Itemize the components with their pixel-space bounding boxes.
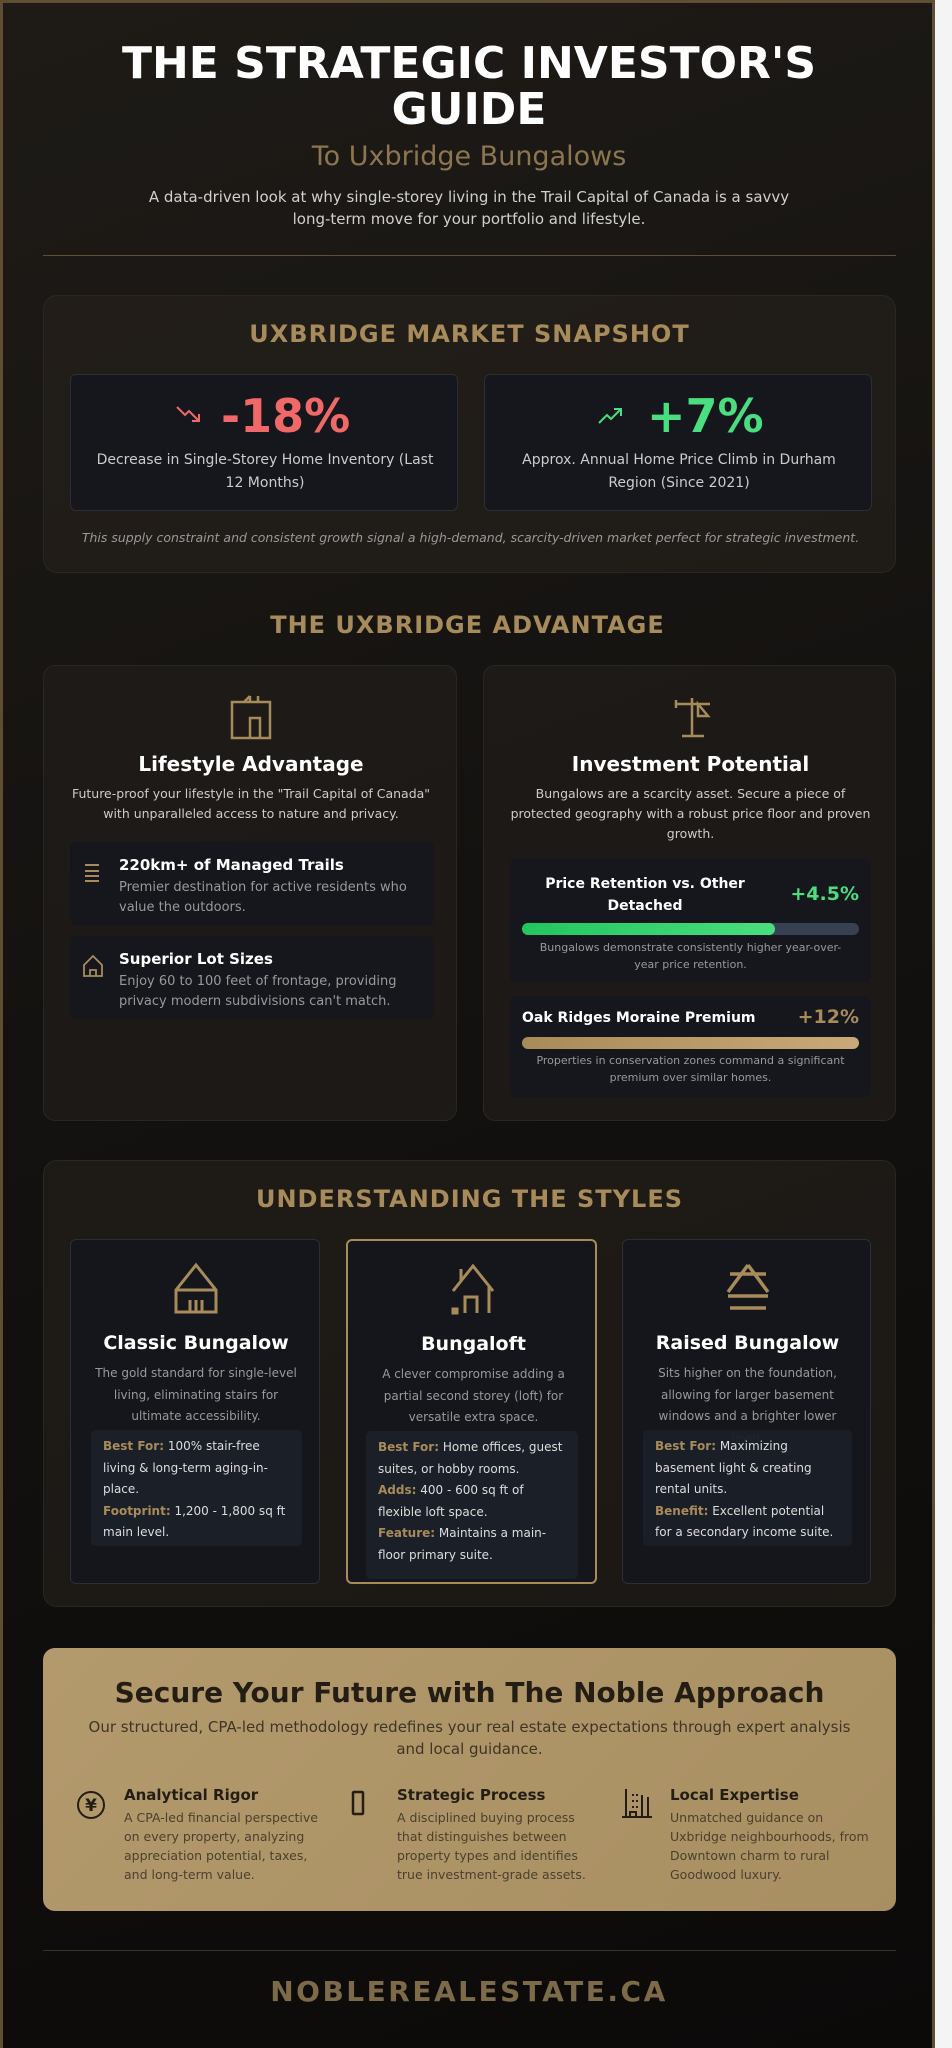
icon: yen (77, 1791, 105, 1819)
card: bungaloft: Adds: 400 - 600 sq ft of flexible loft space. (378, 1483, 524, 1518)
note: This supply constraint and consistent growth signal a high-demand, scarcity-driven market perfect for strategic investment. (82, 530, 859, 545)
item: trails (70, 842, 434, 925)
icon: down trend (176, 406, 200, 422)
panel: investment (483, 665, 896, 1121)
card: bungaloft: A clever compromise adding a partial second storey (loft) for versatile extra space. (382, 1367, 565, 1424)
card: bungaloft: Best For: Home offices, guest suites, or hobby rooms. (378, 1440, 562, 1476)
card: classic bungalow (70, 1239, 320, 1584)
panel: lifestyle (43, 665, 457, 1121)
bar: price retention: Price Retention vs. Other Detached (545, 876, 745, 914)
icon: building (230, 695, 272, 740)
card: bungaloft (346, 1239, 597, 1584)
icon: classic house (174, 1262, 218, 1314)
bar: price retention: Bungalows demonstrate consistently higher year-over-year price retention. (540, 941, 841, 971)
panel: market snapshot (43, 295, 896, 573)
CTA title: Secure Your Future with The Noble Approach (115, 1676, 824, 1709)
heading: advantage: THE UXBRIDGE ADVANTAGE (270, 611, 665, 639)
icon: yen: ¥ (85, 1796, 97, 1816)
bar: moraine premium (510, 996, 871, 1097)
panel: lifestyle: Future-proof your lifestyle in the "Trail Capital of Canada" with unparalleled access to nature and privacy. (72, 786, 430, 821)
column: strategic process (352, 1786, 586, 1882)
number: +7% (647, 389, 764, 443)
icon: phone (352, 1790, 364, 1816)
column: analytical rigor: A CPA-led financial perspective on every property, analyzing appreciation potential, taxes, and long-term value. (124, 1810, 318, 1882)
title: THE STRATEGIC INVESTOR'S (122, 38, 816, 89)
stat: inventory decrease (70, 374, 458, 511)
column: strategic process: Strategic Process (397, 1786, 545, 1804)
icon: stack (85, 864, 99, 882)
card title: Lifestyle Advantage (138, 752, 364, 776)
bar: moraine premium: Properties in conservation zones command a significant premium over similar homes. (536, 1054, 845, 1084)
card: classic bungalow: Footprint: 1,200 - 1,800 sq ft main level. (103, 1504, 285, 1539)
icon: buildings (622, 1789, 652, 1818)
card: raised bungalow (622, 1239, 871, 1584)
card: classic bungalow: Best For: 100% stair-free living & long-term aging-in-place. (103, 1439, 268, 1496)
icon: raised house (726, 1264, 770, 1310)
icon: up trend (598, 408, 622, 424)
card: classic bungalow: The gold standard for single-level living, eliminating stairs for ultimate accessibility. (95, 1366, 297, 1423)
stat: price climb (484, 374, 872, 511)
card: classic bungalow: Classic Bungalow (103, 1332, 289, 1354)
column: local expertise (622, 1786, 869, 1882)
column: strategic process: A disciplined buying process that distinguishes between property types and identifies true investment-grade assets. (397, 1810, 586, 1882)
item: trails: 220km+ of Managed Trails (119, 856, 344, 874)
icon: crane (674, 698, 710, 738)
heading: snapshot: UXBRIDGE MARKET SNAPSHOT (249, 320, 690, 348)
subtitle: To Uxbridge Bungalows (312, 141, 626, 172)
title: GUIDE (392, 84, 546, 135)
item: lot sizes: Superior Lot Sizes (119, 950, 273, 968)
card: bungaloft: Feature: Maintains a main-floor primary suite. (378, 1526, 546, 1562)
item: lot sizes: Enjoy 60 to 100 feet of frontage, providing privacy modern subdivisions can't match. (119, 974, 396, 1009)
card title: Investment Potential (572, 752, 809, 776)
icon: loft house (452, 1264, 494, 1314)
bar: moraine premium: Oak Ridges Moraine Premium (522, 1010, 756, 1026)
column: local expertise: Unmatched guidance on Uxbridge neighbourhoods, from Downtown charm to rural Goodwood luxury. (670, 1810, 869, 1882)
heading: styles: UNDERSTANDING THE STYLES (256, 1185, 683, 1213)
number: -18% (221, 389, 350, 443)
intro text: A data-driven look at why single-storey living in the Trail Capital of Canada is a savvy long-term move for your portfolio and lifestyle. (149, 188, 789, 228)
footer: website: NOBLEREALESTATE.CA (270, 1975, 668, 2008)
icon: house (83, 954, 103, 977)
column: local expertise: Local Expertise (670, 1786, 799, 1804)
stat: inventory decrease: Decrease in Single-Storey Home Inventory (Last 12 Months) (97, 452, 433, 491)
column: analytical rigor: Analytical Rigor (124, 1786, 258, 1804)
bar: price retention: +4.5% (790, 883, 859, 905)
card: raised bungalow: Benefit: Excellent potential for a secondary income suite. (655, 1504, 833, 1539)
panel: CTA noble approach: Our structured, CPA-led methodology redefines your real estate expectations through expert analysis and local guidance. (89, 1718, 850, 1758)
item: lot sizes (70, 936, 434, 1019)
panel: investment: Bungalows are a scarcity asset. Secure a piece of protected geography with a robust price floor and proven growth. (511, 786, 870, 841)
bar: moraine premium: +12% (798, 1006, 859, 1028)
item: trails: Premier destination for active residents who value the outdoors. (119, 880, 407, 915)
stat: price climb: Approx. Annual Home Price Climb in Durham Region (Since 2021) (522, 452, 836, 491)
panel: styles (43, 1160, 896, 1607)
card: raised bungalow: Raised Bungalow (656, 1332, 839, 1354)
bar: price retention (510, 859, 871, 982)
card: raised bungalow: Sits higher on the foundation, allowing for larger basement windows and a brighter lower level. (658, 1366, 837, 1444)
column: analytical rigor (77, 1786, 318, 1882)
card: raised bungalow: Best For: Maximizing basement light & creating rental units. (655, 1439, 812, 1496)
panel: CTA noble approach (43, 1648, 896, 1911)
card: bungaloft: Bungaloft (421, 1333, 526, 1355)
title (122, 38, 816, 135)
